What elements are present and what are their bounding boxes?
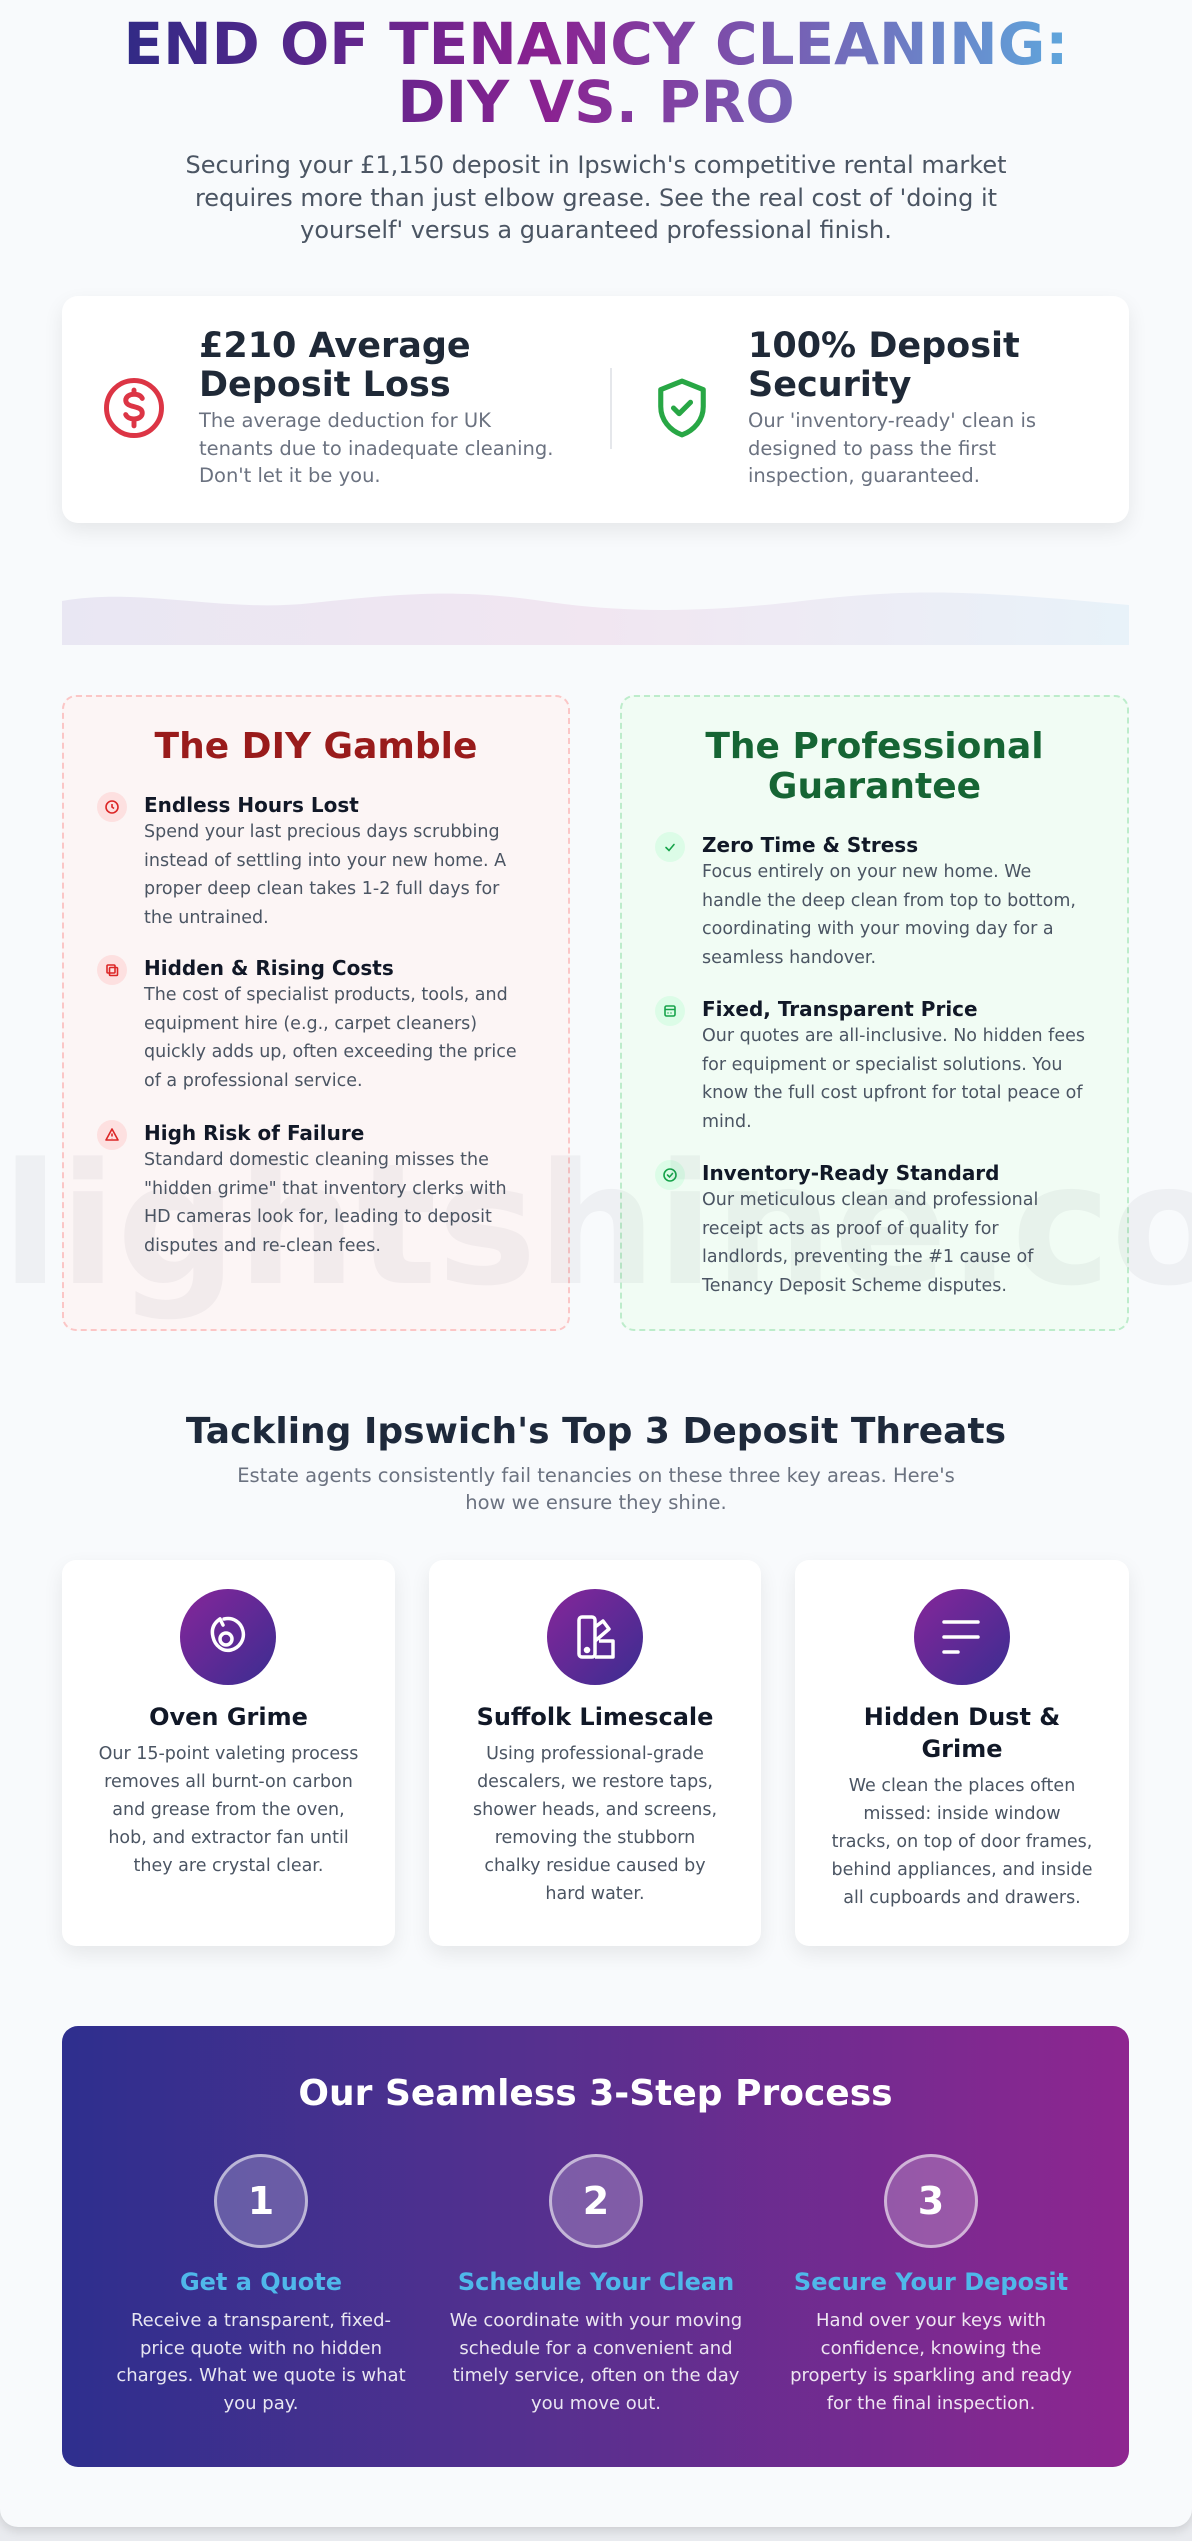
icon: oven	[180, 1589, 276, 1685]
item: inventory-ready: Tenancy Deposit Scheme disputes.	[702, 1276, 1007, 1296]
icon: lines	[914, 1589, 1010, 1685]
stat: security: Security	[748, 365, 911, 405]
heading: Guarantee	[768, 766, 981, 807]
item: zero time	[655, 832, 1076, 968]
threats heading: Tackling Ipswich's Top 3 Deposit Threats	[186, 1411, 1006, 1452]
card: oven grime	[62, 1560, 395, 1946]
item: inventory-ready	[655, 1160, 1038, 1296]
icon: shield	[658, 378, 706, 438]
title: END OF TENANCY CLEANING:	[123, 10, 1069, 78]
icon: clock	[97, 792, 127, 822]
icon: costs	[97, 955, 127, 985]
item: fixed price: Our quotes are all-inclusive. No hidden fees for equipment or specialist solutions. You know the full cost upfront for total peace of mind.	[702, 1026, 1085, 1132]
stat: security: 100% Deposit	[748, 326, 1020, 366]
stat: deposit loss: £210 Average	[199, 326, 471, 366]
item: hours lost: Endless Hours Lost	[144, 793, 359, 817]
item: hours lost: the untrained.	[144, 908, 269, 928]
stat: deposit loss	[198, 326, 553, 487]
card: hidden dust: all cupboards and drawers.	[843, 1888, 1081, 1908]
item: hidden costs: The cost of specialist products, tools, and equipment hire (e.g., carpet cleaners) quickly adds up, often exceeding the price of a professional service.	[144, 985, 517, 1090]
item: risk: Standard domestic cleaning misses the "hidden grime" that inventory clerks with HD cameras look for, leading to deposit disputes and re-clean fees.	[144, 1150, 507, 1256]
card: limescale: Using professional-grade descalers, we restore taps, shower heads, and screens, removing the stubborn chalky residue caused by hard water.	[473, 1744, 717, 1904]
step 1: 1	[248, 2179, 274, 2223]
card: oven grime: Oven Grime	[149, 1703, 308, 1731]
item: hidden costs: Hidden & Rising Costs	[144, 956, 394, 980]
stat: deposit loss: The average deduction for UK tenants due to inadequate cleaning. Don't let it be you.	[199, 409, 553, 487]
heading	[705, 726, 1044, 807]
item: inventory-ready: receipt acts as proof of quality for	[702, 1218, 999, 1238]
threats subtitle: Estate agents consistently fail tenancies on these three key areas. Here's how we ensure they shine.	[237, 1464, 955, 1514]
item: inventory-ready: Our meticulous clean and professional	[702, 1190, 1038, 1210]
card: limescale	[429, 1560, 761, 1946]
icon: check	[655, 832, 685, 862]
item: hours lost	[97, 792, 506, 928]
heading: The Professional	[705, 726, 1044, 767]
step 1	[116, 2154, 406, 2414]
step 2: We coordinate with your moving schedule for a convenient and timely service, often on the day you move out.	[450, 2310, 742, 2414]
panel: professional guarantee	[620, 695, 1129, 1331]
stats card	[62, 296, 1129, 523]
item: fixed price: Fixed, Transparent Price	[702, 997, 978, 1021]
step 3	[790, 2154, 1072, 2414]
card: hidden dust: missed: inside window	[863, 1804, 1061, 1824]
step 2	[450, 2154, 742, 2414]
heading: Our Seamless 3-Step Process	[298, 2073, 893, 2114]
item: hidden costs	[97, 955, 517, 1090]
card: limescale: Suffolk Limescale	[477, 1703, 713, 1731]
step 3: 3	[918, 2179, 944, 2223]
wave divider	[62, 592, 1129, 645]
icon: dollar	[104, 378, 164, 438]
item: hours lost: Spend your last precious days scrubbing instead of settling into your new home. A proper deep clean takes 1-2 full days for	[144, 822, 506, 899]
card: hidden dust: behind appliances, and inside	[832, 1860, 1092, 1880]
icon: receipt	[655, 996, 685, 1026]
card: hidden dust: We clean the places often	[849, 1776, 1075, 1796]
step 2: Schedule Your Clean	[458, 2268, 734, 2296]
step 2: 2	[583, 2179, 609, 2223]
icon: check circle	[655, 1160, 685, 1190]
step 1: Get a Quote	[180, 2268, 342, 2296]
panel: process	[62, 2026, 1129, 2467]
item: zero time: Focus entirely on your new home. We handle the deep clean from top to bottom, coordinating with your moving day for a seamless handover.	[702, 862, 1076, 968]
item: inventory-ready: Inventory-Ready Standard	[702, 1161, 1000, 1185]
title: DIY VS. PRO	[397, 68, 795, 136]
card: hidden dust: Hidden Dust &	[864, 1703, 1060, 1731]
stat: security: Our 'inventory-ready' clean is designed to pass the first inspection, guaranteed.	[748, 409, 1036, 487]
card: hidden dust: Grime	[921, 1735, 1003, 1763]
panel: DIY gamble	[62, 695, 570, 1331]
item: risk	[97, 1120, 507, 1256]
icon: warning	[97, 1120, 127, 1150]
item: fixed price	[655, 996, 1085, 1132]
stat: security	[748, 326, 1036, 487]
item: inventory-ready: landlords, preventing the #1 cause of	[702, 1247, 1033, 1267]
card: hidden dust: tracks, on top of door frames,	[832, 1832, 1092, 1852]
card: oven grime: Our 15-point valeting process removes all burnt-on carbon and grease from the oven, hob, and extractor fan until they are crystal clear.	[99, 1744, 358, 1876]
icon: swatch	[547, 1589, 643, 1685]
heading: The DIY Gamble	[155, 726, 477, 767]
step 1: Receive a transparent, fixed-price quote with no hidden charges. What we quote is what you pay.	[116, 2310, 406, 2414]
stat: deposit loss: Deposit Loss	[199, 365, 451, 405]
step 3: Hand over your keys with confidence, knowing the property is sparkling and ready for the final inspection.	[790, 2310, 1072, 2414]
title	[123, 10, 1069, 136]
subtitle: Securing your £1,150 deposit in Ipswich's competitive rental market requires more than just elbow grease. See the real cost of 'doing it yourself' versus a guaranteed professional finish.	[185, 151, 1006, 244]
item: zero time: Zero Time & Stress	[702, 833, 918, 857]
step 3: Secure Your Deposit	[794, 2268, 1068, 2296]
item: risk: High Risk of Failure	[144, 1121, 364, 1145]
card: hidden dust	[795, 1560, 1129, 1946]
